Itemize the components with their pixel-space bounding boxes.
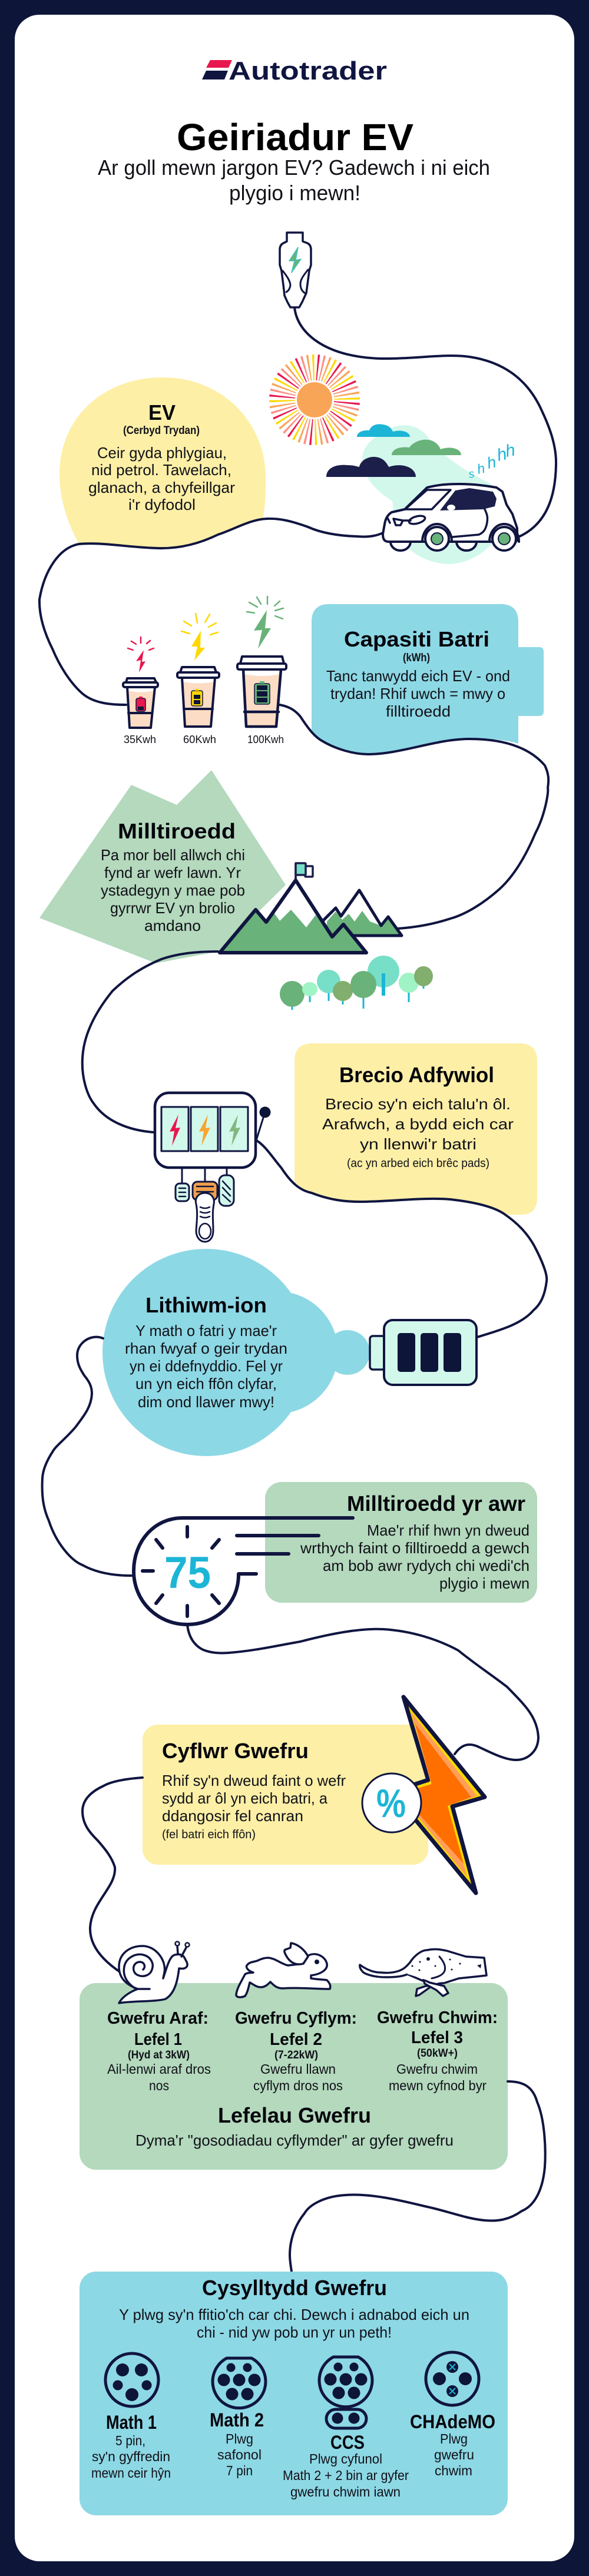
text: connector descriptions: Math 2 + 2 bin ar gyfer xyxy=(283,2468,409,2483)
icon: sun xyxy=(280,365,349,435)
cup labels: 60Kwh xyxy=(183,734,216,745)
title: Geiriadur EV xyxy=(177,116,413,158)
cup labels: 35Kwh xyxy=(124,734,156,745)
text: charge levels: Gwefru chwim xyxy=(396,2061,478,2077)
text: EV: (Cerbyd Trydan) xyxy=(123,425,200,437)
text: charge levels: Gwefru Cyflym: xyxy=(235,2009,357,2028)
panel: Brecio Adfywiol xyxy=(294,1043,537,1215)
text: connector descriptions: Math 1 xyxy=(106,2412,157,2433)
text: Capasiti Batri xyxy=(326,627,510,720)
icon: CCS connector xyxy=(319,2357,372,2428)
text: charge levels: Lefel 3 xyxy=(411,2028,463,2047)
text: Cyflwr Gwefru: sydd ar ôl yn eich batri, a xyxy=(162,1789,328,1807)
text: charge levels: Gwefru Araf: xyxy=(107,2009,209,2028)
cup labels xyxy=(124,734,284,745)
cable: plug to car xyxy=(294,307,556,537)
text: Brecio Adfywiol: Arafwch, a bydd eich car xyxy=(322,1115,514,1133)
text: connector descriptions: CHAdeMO xyxy=(410,2411,495,2432)
text: Cyflwr Gwefru: Cyflwr Gwefru xyxy=(162,1739,309,1763)
cable: lithium blob to speedometer xyxy=(42,1337,131,1576)
text: Cysylltydd Gwefru heading: Y plwg sy'n ffitio'ch car chi. Dewch i adnabod eich un xyxy=(119,2306,469,2323)
icon: clouds xyxy=(326,424,461,477)
text: shhhh: h xyxy=(485,453,498,472)
panel: EV blob xyxy=(59,377,266,548)
text: shhhh xyxy=(468,441,517,481)
text: Cysylltydd Gwefru heading: Cysylltydd Gwefru xyxy=(202,2276,387,2300)
text: charge levels: Gwefru llawn xyxy=(260,2061,336,2077)
text: Milltiroedd yr awr: wrthych faint o filltiroedd a gewch xyxy=(300,1539,530,1557)
text: Milltiroedd: gyrrwr EV yn brolio xyxy=(110,899,235,917)
mint backdrop behind car xyxy=(362,425,505,564)
cup labels: 100Kwh xyxy=(247,734,284,745)
cable: levels to connectors xyxy=(290,2081,545,2272)
icon: Math 2 connector xyxy=(213,2358,266,2408)
text: connector descriptions: sy'n gyffredin xyxy=(92,2449,170,2464)
icon: Math 1 connector xyxy=(105,2353,158,2406)
text: Milltiroedd yr awr: Mae'r rhif hwn yn dweud xyxy=(367,1521,530,1539)
text: Cyflwr Gwefru: Rhif sy'n dweud faint o wefr xyxy=(162,1772,346,1789)
cable: state of charge to snail xyxy=(82,1778,143,1972)
text: charge levels: Lefel 1 xyxy=(134,2030,182,2049)
text: charge levels: (50kW+) xyxy=(417,2047,458,2060)
icon: plug xyxy=(280,233,311,307)
icon: percent circle: % xyxy=(376,1781,406,1826)
text: Cyflwr Gwefru xyxy=(162,1739,346,1841)
text: Lithiwm-ion: rhan fwyaf o geir trydan xyxy=(125,1340,287,1357)
text: EV xyxy=(88,400,235,513)
cable: car to cups xyxy=(39,519,383,705)
text: connector descriptions: CCS xyxy=(330,2432,365,2453)
text: EV: i'r dyfodol xyxy=(128,496,196,513)
text: charge levels: Ail-lenwi araf dros xyxy=(107,2061,211,2077)
text: connector descriptions: 5 pin, xyxy=(115,2433,145,2448)
text: Cyflwr Gwefru: ddangosir fel canran xyxy=(162,1807,303,1825)
text: connector descriptions: Plwg xyxy=(440,2431,468,2446)
text: connector descriptions: Plwg xyxy=(226,2431,253,2446)
text: Cysylltydd Gwefru heading: chi - nid yw pob un yr un peth! xyxy=(197,2323,392,2341)
icon: car xyxy=(383,484,519,551)
icon: cup 35Kwh xyxy=(123,637,158,728)
text: Brecio Adfywiol: Brecio Adfywiol xyxy=(339,1063,494,1087)
text: Milltiroedd yr awr: am bob awr rydych chi wedi'ch xyxy=(323,1557,530,1574)
icon: cup 100Kwh xyxy=(237,596,286,727)
text: Capasiti Batri: filltiroedd xyxy=(386,702,451,720)
text: shhhh: s xyxy=(468,468,476,481)
text: Lithiwm-ion xyxy=(125,1293,287,1411)
text: EV: glanach, a chyfeillgar xyxy=(88,479,235,496)
cable: pedals to battery xyxy=(256,1140,547,1337)
icon: speedometer 75 xyxy=(134,1517,353,1624)
text: shhhh: h xyxy=(476,460,487,477)
text: EV: Ceir gyda phlygiau, xyxy=(97,444,227,462)
text: charge levels: cyflym dros nos xyxy=(253,2078,343,2093)
text: charge levels xyxy=(107,2008,498,2149)
icon: cup 60Kwh xyxy=(177,614,219,727)
text: Milltiroedd yr awr: plygio i mewn xyxy=(439,1574,530,1592)
icon: cheetah xyxy=(360,1949,487,1996)
text: Brecio Adfywiol: (ac yn arbed eich brêc pads) xyxy=(347,1157,489,1170)
text: connector descriptions xyxy=(91,2409,495,2499)
text: Brecio Adfywiol xyxy=(322,1063,514,1170)
text: Brecio Adfywiol: yn llenwi'r batri xyxy=(360,1135,477,1153)
text: Capasiti Batri: (kWh) xyxy=(403,652,430,664)
text: Lithiwm-ion: Y math o fatri y mae'r xyxy=(135,1322,277,1340)
text: connector descriptions: gwefru chwim iawn xyxy=(290,2484,401,2499)
text: Milltiroedd: Pa mor bell allwch chi xyxy=(101,846,245,864)
subtitle: plygio i mewn! xyxy=(229,181,360,205)
text: shhhh: h xyxy=(495,445,508,465)
text: charge levels: (Hyd at 3kW) xyxy=(128,2049,190,2061)
icon: CHAdeMO connector xyxy=(426,2352,479,2405)
icon: mountains xyxy=(220,863,402,953)
panel: Lithiwm-ion blob xyxy=(102,1249,370,1456)
text: connector descriptions: chwim xyxy=(435,2463,472,2478)
subtitle: Ar goll mewn jargon EV? Gadewch i ni eich xyxy=(98,155,490,180)
text: Milltiroedd: ystadegyn y mae pob xyxy=(101,881,245,899)
panel: Capasiti Batri xyxy=(312,604,544,754)
text: Milltiroedd: Milltiroedd xyxy=(118,819,236,843)
text: Brecio Adfywiol: Brecio sy'n eich talu'n ôl. xyxy=(325,1095,511,1113)
logo: Autotrader: Autotrader xyxy=(229,57,387,85)
cable: speedometer to bolt xyxy=(187,1624,538,1760)
text: connector descriptions: Plwg cyfunol xyxy=(309,2451,382,2466)
text: Milltiroedd: fynd ar wefr lawn. Yr xyxy=(104,864,241,881)
text: charge levels: Dyma'r "gosodiadau cyflymder" ar gyfer gwefru xyxy=(135,2131,454,2149)
icon: lightning bolt xyxy=(401,1697,485,1893)
panel: Cysylltydd Gwefru xyxy=(80,2272,508,2515)
subtitle xyxy=(98,155,490,205)
text: connector descriptions: safonol xyxy=(217,2447,262,2462)
text: charge levels: Gwefru Chwim: xyxy=(377,2008,498,2027)
icon: trees xyxy=(280,956,433,1010)
text: charge levels: Lefel 2 xyxy=(270,2030,322,2049)
icon: speedometer 75: 75 xyxy=(164,1548,211,1598)
text: Lithiwm-ion: dim ond llawer mwy! xyxy=(138,1393,274,1411)
text: charge levels: nos xyxy=(149,2078,169,2093)
panel: Lefelau Gwefru xyxy=(80,1983,508,2170)
text: Milltiroedd: amdano xyxy=(144,917,201,934)
panel: Milltiroedd yr awr xyxy=(265,1482,537,1603)
text: Lithiwm-ion: Lithiwm-ion xyxy=(145,1293,267,1317)
icon: battery xyxy=(370,1320,477,1385)
text: Capasiti Batri: Capasiti Batri xyxy=(344,627,489,651)
text: Capasiti Batri: trydan! Rhif uwch = mwy o xyxy=(330,685,505,702)
text: connector descriptions: Math 2 xyxy=(210,2409,264,2431)
text: Lithiwm-ion: un yn eich ffôn clyfar, xyxy=(135,1375,277,1393)
text: charge levels: (7-22kW) xyxy=(274,2049,318,2061)
cable: mountain to pedals xyxy=(82,952,218,1132)
text: Cysylltydd Gwefru heading xyxy=(119,2276,469,2341)
text: Milltiroedd yr awr: Milltiroedd yr awr xyxy=(347,1491,525,1516)
text: EV: EV xyxy=(148,400,176,425)
text: connector descriptions: mewn ceir hŷn xyxy=(91,2465,171,2481)
text: Milltiroedd yr awr xyxy=(300,1491,530,1592)
text: Capasiti Batri: Tanc tanwydd eich EV - ond xyxy=(326,667,510,685)
icon: snail xyxy=(119,1942,190,2003)
text: charge levels: mewn cyfnod byr xyxy=(389,2078,487,2093)
text: connector descriptions: gwefru xyxy=(434,2447,474,2462)
icon: rabbit xyxy=(236,1943,330,1997)
panel: Cyflwr Gwefru xyxy=(143,1725,428,1865)
panel: Milltiroedd mountain xyxy=(39,770,286,963)
text: Milltiroedd xyxy=(101,819,245,934)
text: shhhh: h xyxy=(504,441,517,461)
text: EV: nid petrol. Tawelach, xyxy=(91,461,231,479)
text: connector descriptions: 7 pin xyxy=(226,2463,253,2478)
icon: percent circle xyxy=(362,1773,421,1832)
cable: cups to mountain xyxy=(280,705,548,929)
icon: regen braking dashboard and pedals xyxy=(155,1093,271,1242)
text: Lithiwm-ion: yn ei ddefnyddio. Fel yr xyxy=(130,1357,283,1375)
text: Cyflwr Gwefru: (fel batri eich ffôn) xyxy=(162,1828,256,1841)
text: charge levels: Lefelau Gwefru xyxy=(218,2103,371,2127)
